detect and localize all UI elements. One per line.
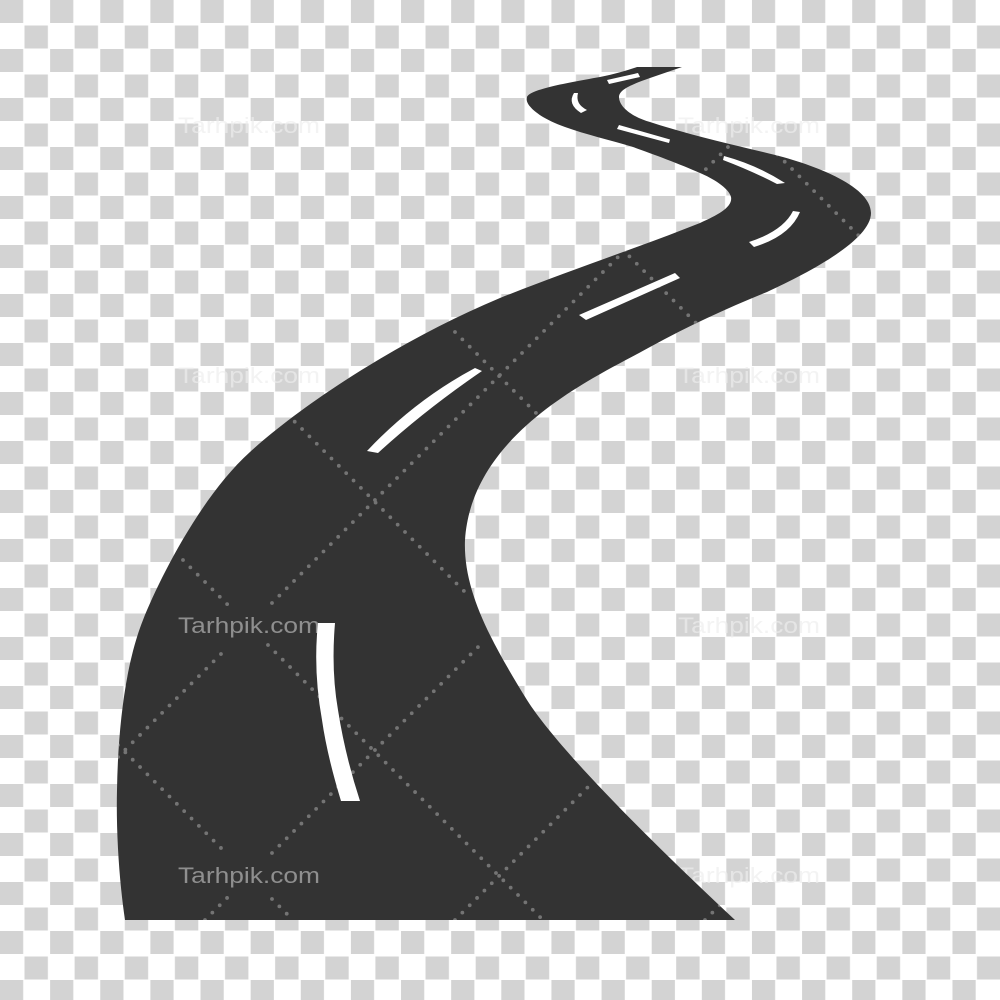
faint watermarks on background: Tarhpik.com <box>678 863 820 888</box>
watermarks on road: Tarhpik.com <box>178 613 320 638</box>
faint watermarks on background: Tarhpik.com <box>678 363 820 388</box>
watermarks on road <box>178 613 320 888</box>
faint watermarks on background <box>178 113 820 888</box>
road surface <box>117 67 871 920</box>
road <box>117 67 871 920</box>
lane markings <box>316 73 800 801</box>
watermarks on road: Tarhpik.com <box>178 863 320 888</box>
faint watermarks on background: Tarhpik.com <box>678 613 820 638</box>
faint watermarks on background: Tarhpik.com <box>678 113 820 138</box>
faint watermarks on background: Tarhpik.com <box>178 363 320 388</box>
faint watermarks on background: Tarhpik.com <box>178 113 320 138</box>
dotted watermark lattice on road <box>118 142 862 920</box>
